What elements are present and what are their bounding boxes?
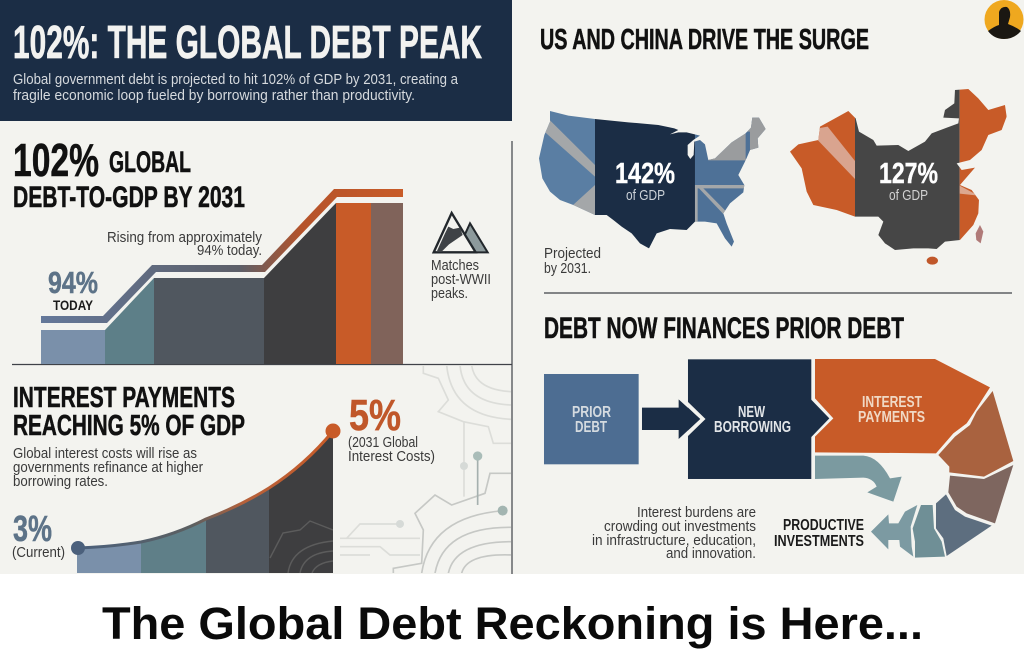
label: 5% 2031: Interest Costs) bbox=[348, 448, 435, 465]
label: China 127% of GDP: 127% bbox=[879, 158, 938, 190]
label: US 142% of GDP bbox=[615, 158, 675, 204]
interest description: borrowing rates. bbox=[13, 473, 108, 490]
label: China 127% of GDP: of GDP bbox=[889, 187, 928, 204]
map: China bbox=[785, 85, 1013, 265]
box label: prior debt bbox=[572, 404, 611, 436]
note: projected by 2031: by 2031. bbox=[544, 260, 591, 277]
heading: 102% global debt-to-GDP bbox=[13, 134, 245, 214]
flow diagram bbox=[544, 359, 1013, 558]
panel: debt now finances prior debt bbox=[544, 312, 1013, 562]
box label: interest payments: PAYMENTS bbox=[858, 409, 925, 426]
heading: 102% global debt-to-GDP: GLOBAL bbox=[109, 146, 191, 179]
heading: interest payments bbox=[13, 382, 245, 442]
header description: Global government debt is projected to hit 102% of GDP by 2031, creating a bbox=[13, 71, 459, 88]
note: projected by 2031 bbox=[544, 245, 601, 277]
label: China 127% of GDP bbox=[879, 158, 938, 204]
box label: new borrowing: NEW bbox=[738, 404, 766, 421]
panel: header banner bbox=[0, 0, 512, 121]
label: 94% today: TODAY bbox=[53, 297, 94, 313]
curve area chart bbox=[71, 424, 340, 573]
label: US 142% of GDP: of GDP bbox=[626, 187, 665, 204]
box label: new borrowing bbox=[714, 404, 791, 436]
panel: interest payments chart bbox=[12, 382, 435, 573]
note: crowding out investments: Interest burdens are bbox=[637, 504, 756, 521]
interest description bbox=[13, 445, 203, 490]
heading: US and China: US AND CHINA DRIVE THE SURGE bbox=[540, 24, 869, 56]
icon: mountains bbox=[434, 213, 488, 252]
main title: 102%: THE GLOBAL DEBT PEAK bbox=[13, 16, 482, 68]
label: 94% today bbox=[48, 265, 98, 313]
label: 94% today: 94% bbox=[48, 265, 98, 300]
label: 5% 2031: 5% bbox=[349, 391, 401, 440]
box label: interest payments bbox=[858, 394, 925, 426]
note: matches post-WWII peaks: post-WWII bbox=[431, 271, 491, 288]
heading: interest payments: INTEREST PAYMENTS bbox=[13, 382, 235, 414]
heading: 102% global debt-to-GDP: DEBT-TO-GDP BY 2031 bbox=[13, 181, 245, 214]
note: matches post-WWII peaks bbox=[431, 257, 491, 302]
label: 5% 2031: (2031 Global bbox=[348, 434, 418, 451]
header description bbox=[13, 71, 459, 104]
icon: author avatar bbox=[984, 0, 1024, 39]
label: productive investments bbox=[774, 517, 864, 550]
annotation: rising from 94%: Rising from approximately bbox=[107, 229, 262, 246]
label: productive investments: INVESTMENTS bbox=[774, 533, 864, 550]
note: matches post-WWII peaks: Matches bbox=[431, 257, 479, 274]
box label: new borrowing: BORROWING bbox=[714, 419, 791, 436]
annotation: rising from 94%: 94% today. bbox=[197, 242, 262, 259]
note: crowding out investments: in infrastructure, education, bbox=[592, 532, 756, 549]
box label: prior debt: DEBT bbox=[575, 419, 607, 436]
panel: US and China bbox=[535, 0, 1024, 277]
decorative gears and circuits bbox=[340, 365, 512, 573]
box label: prior debt: PRIOR bbox=[572, 404, 611, 421]
note: projected by 2031: Projected bbox=[544, 245, 601, 262]
note: crowding out investments: and innovation. bbox=[666, 545, 756, 562]
heading: interest payments: REACHING 5% OF GDP bbox=[13, 410, 245, 442]
panel dividers bbox=[12, 141, 1012, 574]
heading: 102% global debt-to-GDP: 102% bbox=[13, 134, 99, 186]
label: US 142% of GDP: 142% bbox=[615, 158, 675, 190]
annotation: rising from 94% bbox=[107, 229, 262, 259]
interest description: governments refinance at higher bbox=[13, 459, 203, 476]
note: crowding out investments: crowding out investments bbox=[604, 518, 756, 535]
interest description: Global interest costs will rise as bbox=[13, 445, 197, 462]
label: 5% 2031 bbox=[348, 391, 435, 465]
box label: interest payments: INTEREST bbox=[862, 394, 922, 411]
label: 3% current: (Current) bbox=[12, 544, 65, 561]
footer headline: The Global Debt Reckoning is Here... bbox=[102, 598, 923, 649]
note: matches post-WWII peaks: peaks. bbox=[431, 285, 468, 302]
note: crowding out investments bbox=[592, 504, 756, 562]
header description: fragile economic loop fueled by borrowing rather than productivity. bbox=[13, 87, 415, 104]
map: United States bbox=[539, 111, 766, 248]
label: productive investments: PRODUCTIVE bbox=[783, 517, 864, 534]
panel: debt to GDP chart bbox=[13, 134, 491, 364]
stepped bar chart bbox=[41, 189, 403, 364]
label: 3% current: 3% bbox=[13, 508, 52, 549]
